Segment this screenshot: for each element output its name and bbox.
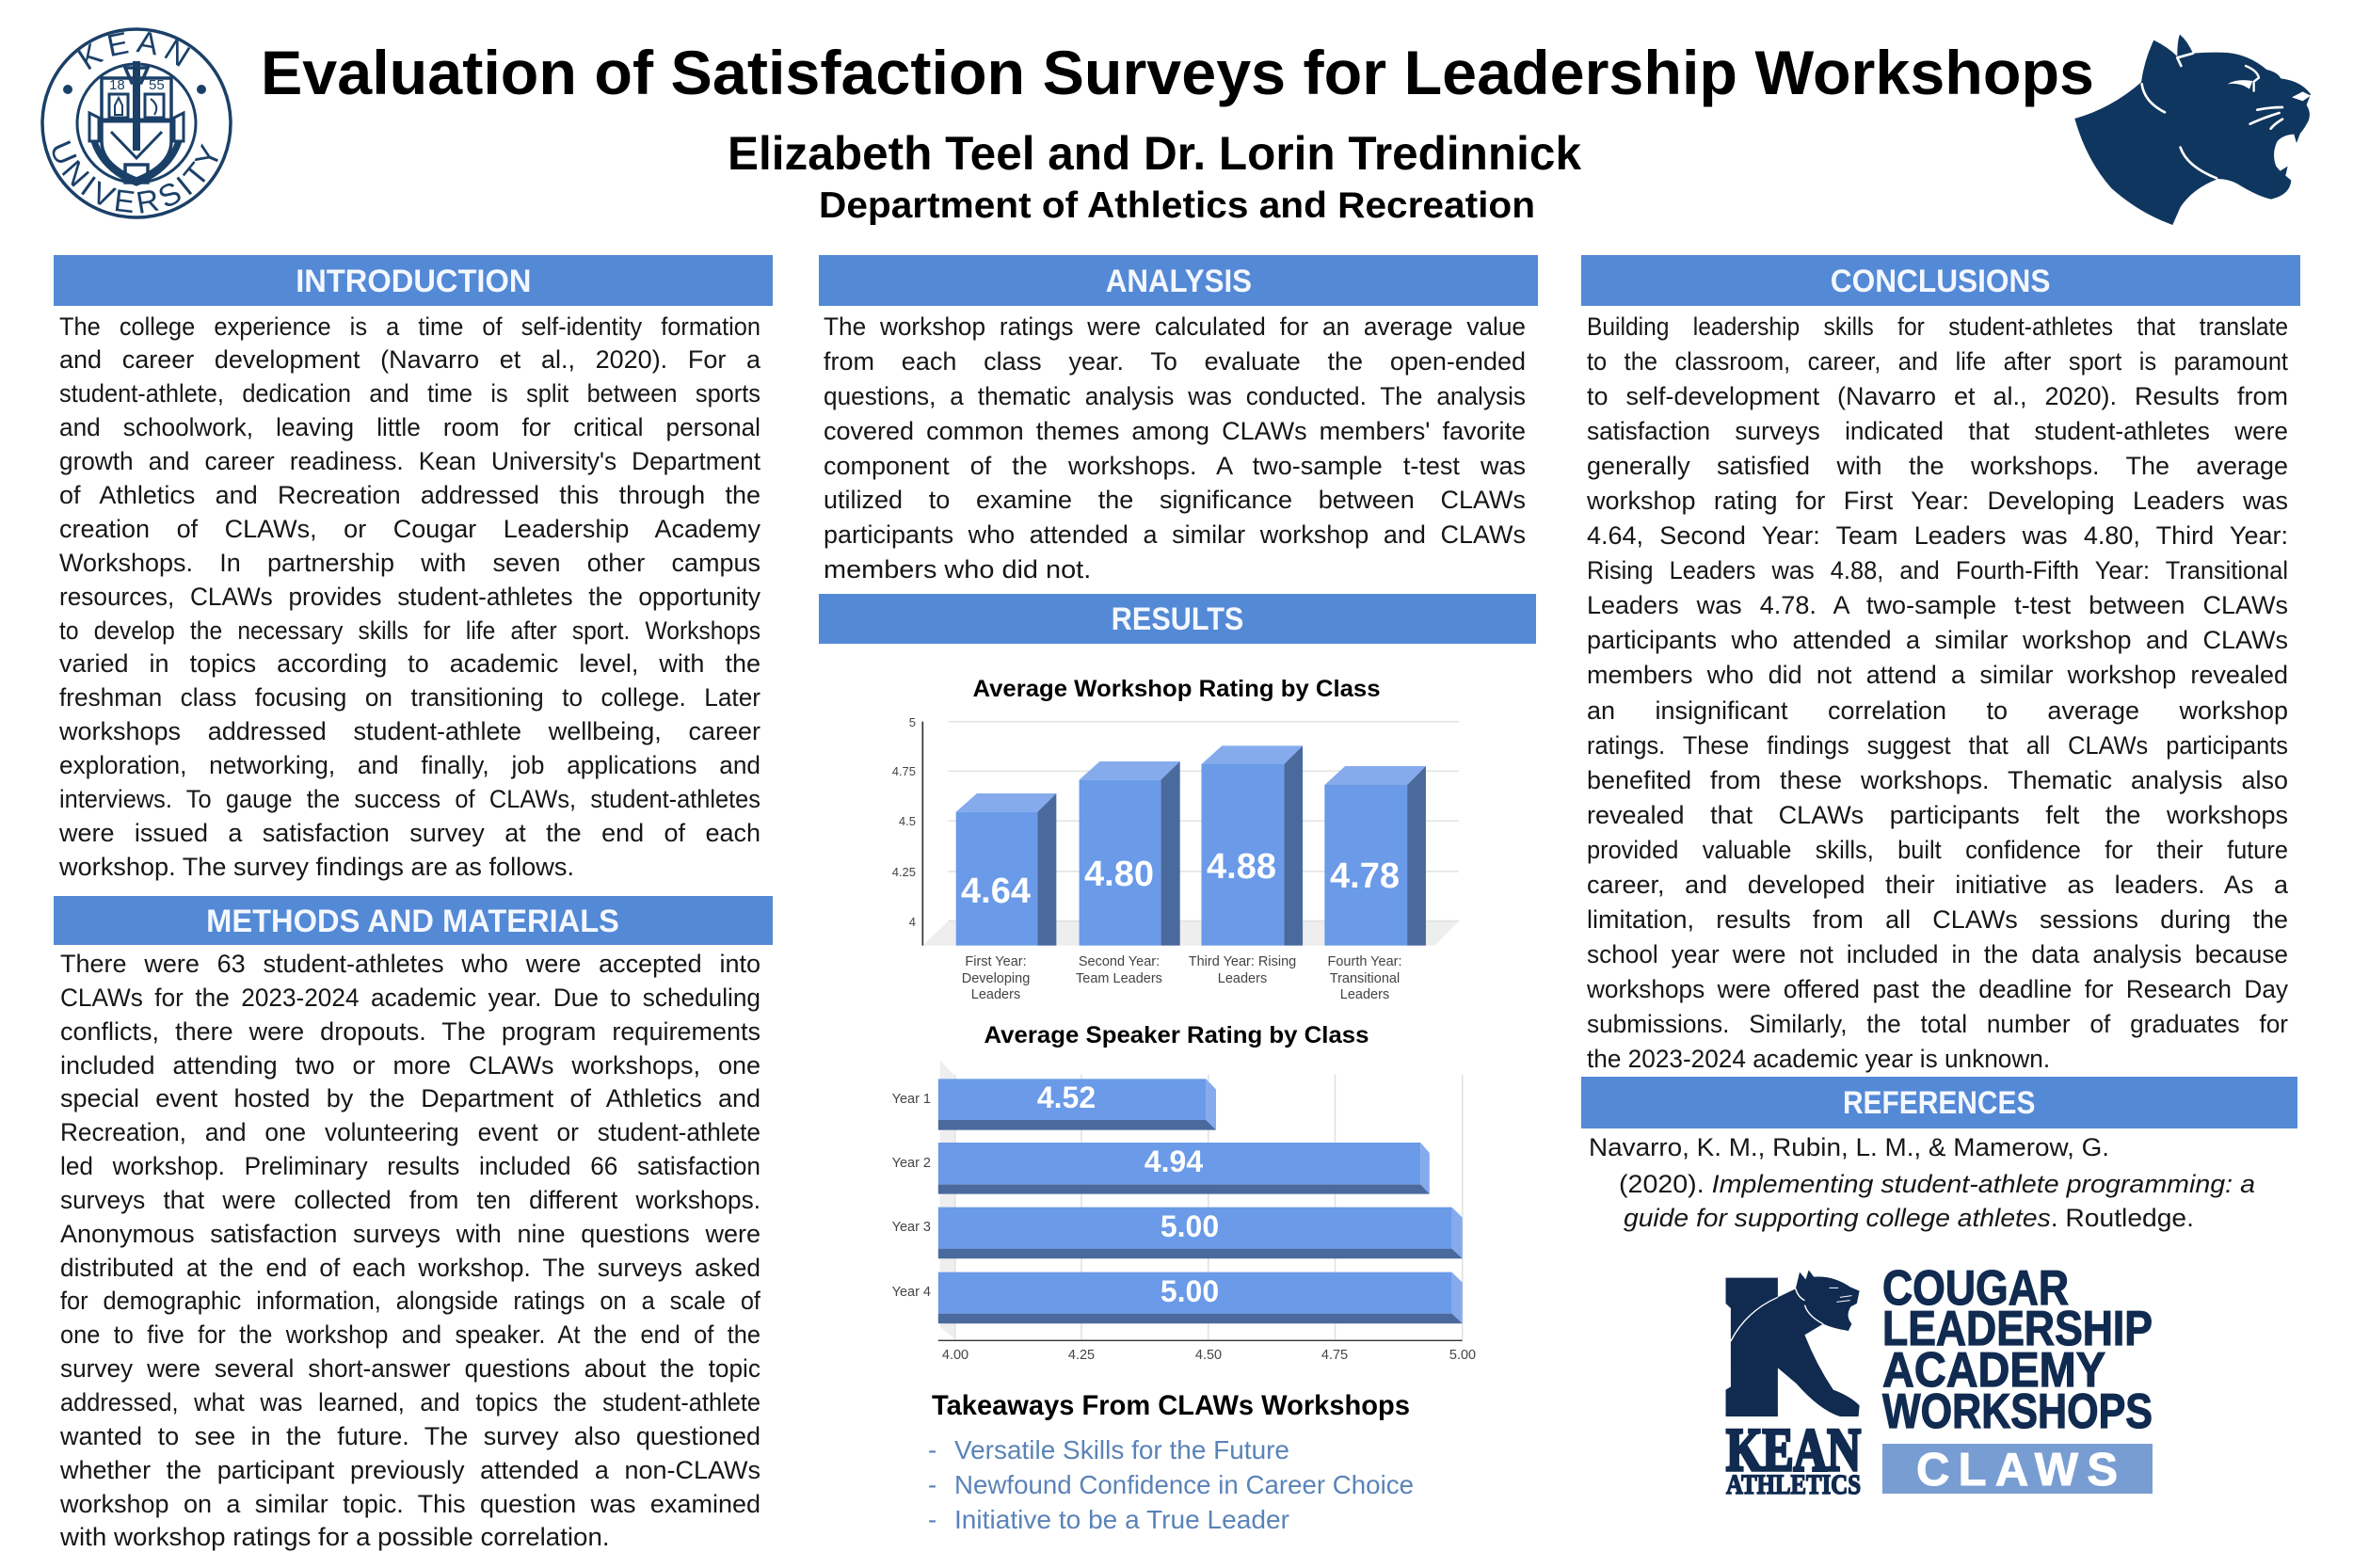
- text block: conclusions: Building leadership skills for student-athletes that translate: [1587, 312, 2288, 341]
- text block: conclusions: workshop rating for First Year: Developing Leaders was: [1587, 487, 2288, 515]
- text block: methods and materials: Recreation, and one volunteering event or student-athlete: [60, 1118, 760, 1146]
- text block: methods and materials: CLAWs for the 2023-2024 academic year. Due to scheduling: [60, 984, 760, 1012]
- bar chart: average speaker rating by class: 5.00: [1160, 1274, 1219, 1308]
- bar chart: average workshop rating by class: Leaders: [971, 987, 1020, 1002]
- text block: analysis: [824, 312, 1526, 584]
- text block: analysis: The workshop ratings were calculated for an average value: [824, 312, 1526, 341]
- bar chart: average workshop rating by class: [892, 676, 1459, 1002]
- bar chart: average speaker rating by class: Year 1: [892, 1092, 931, 1107]
- text block: methods and materials: There were 63 student-athletes who were accepted into: [60, 950, 760, 978]
- bar: first year 4.64: [956, 793, 1056, 946]
- text block: conclusions: 4.64, Second Year: Team Leaders was 4.80, Third Year:: [1587, 521, 2288, 550]
- text block: introduction: student-athlete, dedication and time is split between sports: [59, 379, 760, 408]
- text block: introduction: The college experience is a time of self-identity formation: [59, 312, 760, 341]
- heading: results: [819, 594, 1536, 644]
- text block: methods and materials: whether the participant previously attended a non-CLAWs: [60, 1456, 760, 1484]
- bar chart: average speaker rating by class: 4.75: [1321, 1348, 1348, 1363]
- text block: conclusions: the 2023-2024 academic year is unknown.: [1587, 1045, 2050, 1073]
- heading: methods and materials: METHODS AND MATERIALS: [207, 904, 619, 939]
- bar chart: average speaker rating by class: 4.94: [1144, 1144, 1203, 1178]
- bar chart: average workshop rating by class: 4.88: [1207, 847, 1276, 887]
- bar chart: average speaker rating by class: 5.00: [1449, 1348, 1476, 1363]
- bar chart: average speaker rating by class: Year 4: [892, 1285, 931, 1300]
- bar chart: average speaker rating by class: 4.50: [1195, 1348, 1222, 1363]
- text block: conclusions: career, and developed their initiative as leaders. As a: [1587, 871, 2288, 899]
- logo: Kean University seal: KEAN: [77, 32, 190, 70]
- text block: conclusions: generally satisfied with the workshops. The average: [1587, 452, 2288, 480]
- text block: introduction: exploration, networking, and finally, job applications and: [59, 751, 760, 779]
- text block: conclusions: to self-development (Navarro et al., 2020). Results from: [1587, 382, 2288, 410]
- takeaway items: Versatile Skills for the Future: [954, 1435, 1289, 1464]
- takeaway items: -: [928, 1435, 936, 1464]
- bar chart: average workshop rating by class: First Year:: [965, 954, 1027, 969]
- text block: introduction: freshman class focusing on transitioning to college. Later: [59, 683, 760, 712]
- bar chart: average workshop rating by class: Transitional: [1330, 971, 1400, 986]
- text block: methods and materials: Anonymous satisfaction surveys with nine questions were: [60, 1220, 760, 1248]
- text block: conclusions: submissions. Similarly, the total number of graduates for: [1587, 1010, 2288, 1038]
- text block: conclusions: revealed that CLAWs participants felt the workshops: [1587, 801, 2288, 829]
- bar chart: average workshop rating by class: Team Leaders: [1076, 971, 1162, 986]
- Cougar Leadership Academy Workshops wordmark: COUGAR: [1882, 1261, 2069, 1316]
- icon: K with cougar: [1726, 1270, 1860, 1416]
- text block: conclusions: workshops were offered past the deadline for Research Day: [1587, 975, 2288, 1003]
- Kean Athletics wordmark: [1726, 1416, 1861, 1500]
- text block: analysis: covered common themes among CLAWs members' favorite: [824, 417, 1526, 445]
- heading: introduction: INTRODUCTION: [296, 264, 531, 299]
- title: Evaluation of Satisfaction Surveys for Leadership Workshops: [261, 38, 2094, 107]
- text block: introduction: resources, CLAWs provides student-athletes the opportunity: [59, 583, 760, 611]
- text block: conclusions: [1587, 312, 2288, 1073]
- text block: conclusions: Leaders was 4.78. A two-sample t-test between CLAWs: [1587, 591, 2288, 619]
- text block: methods and materials: survey were several short-answer questions about the topic: [60, 1354, 760, 1383]
- logo: Kean Athletics and CLAWs: [1726, 1261, 2153, 1500]
- bar chart: average speaker rating by class: 4.00: [942, 1348, 968, 1363]
- text block: introduction: interviews. To gauge the success of CLAWs, student-athletes: [59, 785, 760, 813]
- text block: analysis: component of the workshops. A two-sample t-test was: [824, 452, 1526, 480]
- text block: methods and materials: special event hosted by the Department of Athletics and: [60, 1084, 760, 1112]
- chart title: Average Speaker Rating by Class: [984, 1022, 1369, 1048]
- text block: analysis: utilized to examine the significance between CLAWs: [824, 486, 1526, 514]
- text block: conclusions: members who did not attend a similar workshop revealed: [1587, 661, 2288, 689]
- text block: introduction: workshop. The survey findings are as follows.: [59, 853, 574, 881]
- text block: introduction: and schoolwork, leaving little room for critical personal: [59, 413, 760, 441]
- takeaways heading: Takeaways From CLAWs Workshops: [932, 1390, 1410, 1421]
- text block: conclusions: to the classroom, career, and life after sport is paramount: [1587, 347, 2288, 376]
- text block: references: guide for supporting college athletes . Routledge.: [1624, 1204, 2194, 1232]
- bar chart: average workshop rating by class: Third Year: Rising: [1189, 954, 1296, 969]
- takeaway items: -: [928, 1470, 936, 1499]
- text block: methods and materials: with workshop ratings for a possible correlation.: [60, 1523, 610, 1551]
- text block: methods and materials: surveys that were collected from ten different workshops.: [60, 1186, 760, 1214]
- Cougar Leadership Academy Workshops wordmark: ACADEMY: [1882, 1343, 2105, 1398]
- text block: conclusions: benefited from these workshops. Thematic analysis also: [1587, 766, 2288, 794]
- text block: introduction: to develop the necessary skills for life after sport. Workshops: [59, 616, 760, 645]
- logo: Kean University seal: 18: [109, 77, 125, 93]
- bar chart: average workshop rating by class: 4: [909, 915, 916, 929]
- text block: references: (2020). Implementing student-athlete programming: a: [1619, 1170, 2255, 1198]
- takeaway items: Newfound Confidence in Career Choice: [954, 1470, 1414, 1499]
- text block: introduction: of Athletics and Recreation addressed this through the: [59, 481, 760, 509]
- bar: year 1 4.52: [938, 1079, 1216, 1130]
- bar chart: average workshop rating by class: Developing: [962, 971, 1030, 986]
- bar chart: average workshop rating by class: Leaders: [1218, 971, 1267, 986]
- takeaways list: [928, 1390, 1414, 1534]
- bar chart: average workshop rating by class: Fourth Year:: [1327, 954, 1402, 969]
- logo: Kean University seal: 55: [149, 77, 165, 93]
- bar chart: average workshop rating by class: 4.5: [899, 814, 916, 828]
- heading: references: REFERENCES: [1843, 1085, 2036, 1121]
- bar: second year 4.80: [1080, 761, 1180, 946]
- bar chart: average speaker rating by class: 4.25: [1068, 1348, 1095, 1363]
- logo: Kean University seal: [40, 27, 232, 219]
- text block: methods and materials: conflicts, there were dropouts. The program requirements: [60, 1017, 760, 1046]
- text block: conclusions: provided valuable skills, built confidence for their future: [1587, 836, 2288, 864]
- bar chart: average speaker rating by class: 4.52: [1037, 1080, 1096, 1114]
- bar chart: average workshop rating by class: 4.25: [892, 865, 916, 879]
- bar chart: average speaker rating by class: [892, 1022, 1476, 1363]
- text block: references: [1589, 1133, 2255, 1232]
- takeaway items: [928, 1435, 1414, 1534]
- text block: introduction: varied in topics according to academic level, with the: [59, 649, 760, 678]
- bar: fourth year 4.78: [1324, 766, 1426, 946]
- bar: year 2 4.94: [938, 1143, 1430, 1194]
- authors: Elizabeth Teel and Dr. Lorin Tredinnick: [728, 127, 1581, 180]
- text block: methods and materials: addressed, what was learned, and topics the student-athlete: [60, 1388, 760, 1416]
- bar chart: average workshop rating by class: Leaders: [1340, 987, 1389, 1002]
- department: Department of Athletics and Recreation: [819, 185, 1535, 226]
- heading: conclusions: [1581, 255, 2300, 306]
- text block: introduction: creation of CLAWs, or Cougar Leadership Academy: [59, 515, 760, 543]
- chart title: Average Workshop Rating by Class: [973, 676, 1380, 702]
- bar: year 3 5.00: [938, 1208, 1463, 1258]
- heading: references: [1581, 1077, 2297, 1128]
- heading: results: RESULTS: [1112, 601, 1243, 637]
- text block: methods and materials: distributed at the end of each workshop. The surveys asked: [60, 1254, 760, 1282]
- text block: introduction: were issued a satisfaction survey at the end of each: [59, 819, 760, 847]
- text block: conclusions: participants who attended a similar workshop and CLAWs: [1587, 626, 2288, 654]
- bar chart: average workshop rating by class: 4.80: [1084, 855, 1154, 894]
- Kean Athletics wordmark: ATHLETICS: [1726, 1469, 1861, 1500]
- text block: methods and materials: for demographic information, alongside ratings on a scale of: [60, 1287, 760, 1315]
- text block: conclusions: Rising Leaders was 4.88, and Fourth-Fifth Year: Transitional: [1587, 556, 2288, 584]
- text block: introduction: growth and career readiness. Kean University's Department: [59, 447, 760, 475]
- text block: conclusions: satisfaction surveys indicated that student-athletes were: [1587, 417, 2288, 445]
- heading: methods and materials: [54, 896, 773, 945]
- text block: introduction: [59, 312, 760, 881]
- text block: references: Navarro, K. M., Rubin, L. M., & Mamerow, G.: [1589, 1133, 2109, 1161]
- text block: methods and materials: one to five for the workshop and speaker. At the end of the: [60, 1320, 760, 1349]
- text block: methods and materials: included attending two or more CLAWs workshops, one: [60, 1051, 760, 1080]
- text block: methods and materials: led workshop. Preliminary results included 66 satisfaction: [60, 1152, 760, 1180]
- text block: introduction: and career development (Navarro et al., 2020). For a: [59, 345, 760, 374]
- text block: methods and materials: wanted to see in the future. The survey also questioned: [60, 1422, 760, 1450]
- heading: analysis: [819, 255, 1538, 306]
- bar chart: average speaker rating by class: Year 2: [892, 1156, 931, 1171]
- bar: third year 4.88: [1201, 745, 1303, 946]
- text block: analysis: participants who attended a similar workshop and CLAWs: [824, 520, 1526, 549]
- heading: analysis: ANALYSIS: [1105, 264, 1252, 299]
- bar chart: average workshop rating by class: 5: [909, 715, 916, 729]
- takeaway items: Initiative to be a True Leader: [954, 1505, 1289, 1534]
- text block: analysis: questions, a thematic analysis was conducted. The analysis: [824, 382, 1526, 410]
- CLAWS badge: CLAWS: [1916, 1445, 2118, 1496]
- Cougar Leadership Academy Workshops wordmark: WORKSHOPS: [1882, 1384, 2153, 1439]
- logo: Kean University seal: UNIVERSITY: [53, 140, 218, 214]
- bar chart: average workshop rating by class: 4.78: [1330, 856, 1400, 896]
- text block: analysis: members who did not.: [824, 555, 1091, 584]
- text block: introduction: Workshops. In partnership with seven other campus: [59, 549, 760, 577]
- text block: introduction: workshops addressed student-athlete wellbeing, career: [59, 717, 760, 745]
- text block: methods and materials: workshop on a similar topic. This question was examined: [60, 1489, 760, 1517]
- text block: conclusions: an insignificant correlation to average workshop: [1587, 696, 2288, 725]
- bar chart: average speaker rating by class: Year 3: [892, 1220, 931, 1235]
- heading: conclusions: CONCLUSIONS: [1831, 264, 2051, 299]
- text block: methods and materials: [60, 950, 760, 1551]
- bar chart: average speaker rating by class: 5.00: [1160, 1209, 1219, 1243]
- bar chart: average workshop rating by class: 4.75: [892, 764, 916, 778]
- text block: conclusions: school year were not included in the data analysis because: [1587, 940, 2288, 968]
- takeaway items: -: [928, 1505, 936, 1534]
- text block: conclusions: limitation, results from all CLAWs sessions during the: [1587, 905, 2288, 934]
- bar: year 4 5.00: [938, 1272, 1463, 1323]
- text block: analysis: from each class year. To evaluate the open-ended: [824, 347, 1526, 376]
- Cougar Leadership Academy Workshops wordmark: [1882, 1261, 2153, 1439]
- bar chart: average workshop rating by class: Second Year:: [1079, 954, 1160, 969]
- text block: conclusions: ratings. These findings suggest that all CLAWs participants: [1587, 731, 2288, 760]
- Kean Athletics wordmark: KEAN: [1726, 1416, 1861, 1484]
- heading: introduction: [54, 255, 773, 306]
- bar chart: average workshop rating by class: 4.64: [961, 872, 1031, 911]
- icon: cougar head: [2074, 34, 2311, 225]
- Cougar Leadership Academy Workshops wordmark: LEADERSHIP: [1882, 1302, 2153, 1356]
